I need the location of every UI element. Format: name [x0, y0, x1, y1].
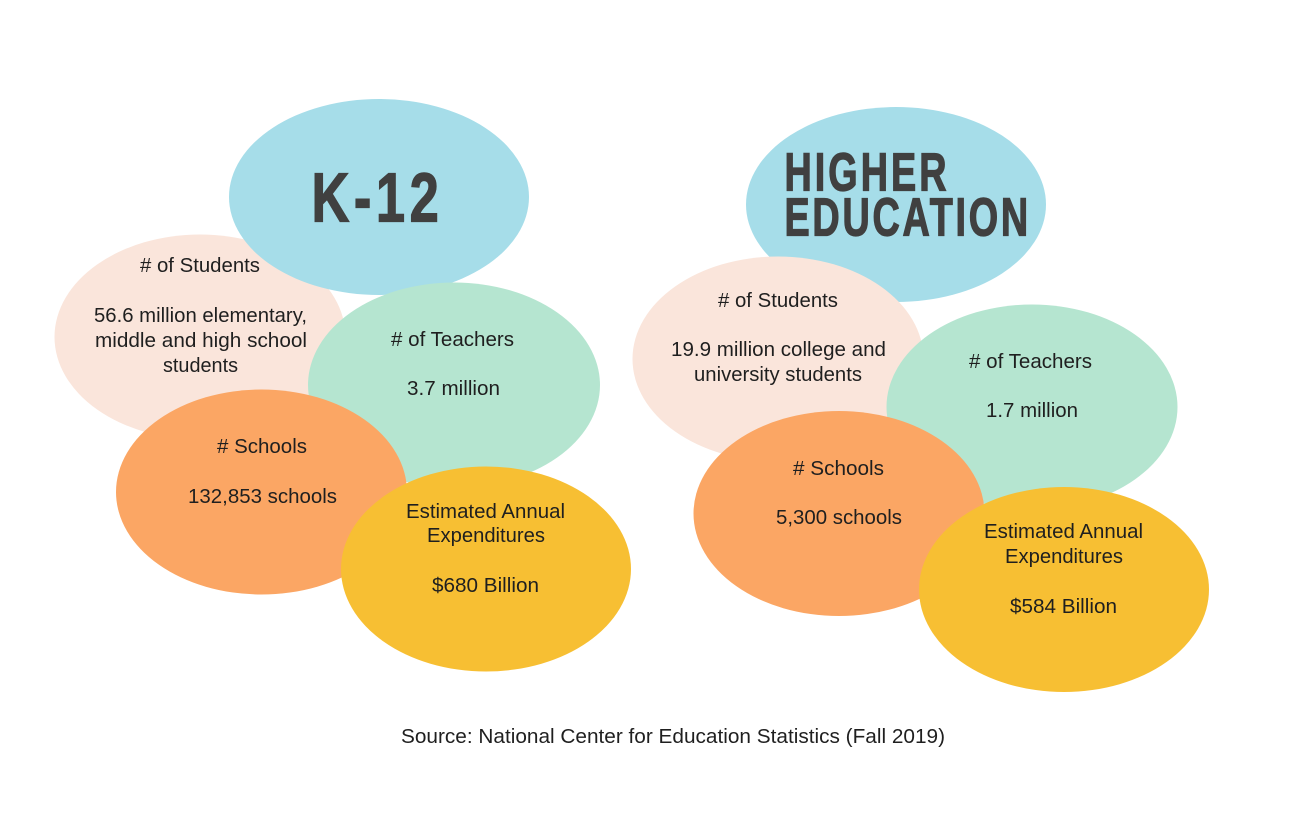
bubble: Higher Ed students: 19.9 million college and: [671, 339, 886, 361]
heading: Higher Education: HIGHER: [784, 142, 950, 202]
bubble: K-12 expenditures: [341, 466, 631, 672]
bubble: Higher Ed teachers: 1.7 million: [986, 400, 1078, 422]
bubble: Higher Ed students: university students: [694, 364, 862, 386]
bubble: K-12 students: students: [163, 355, 238, 377]
bubble: Higher Ed schools: # Schools: [793, 458, 884, 480]
bubble: K-12 expenditures: Expenditures: [427, 525, 545, 547]
bubble: K-12 expenditures: $680 Billion: [432, 575, 539, 597]
source note: Source: National Center for Education Statistics (Fall 2019): [401, 726, 945, 748]
heading: Higher Education: [746, 107, 1046, 302]
bubble: Higher Ed expenditures: $584 Billion: [1010, 596, 1117, 618]
bubble: K-12 expenditures: Estimated Annual: [406, 501, 565, 523]
bubble: K-12 students: middle and high school: [95, 330, 307, 352]
bubble: Higher Ed students: # of Students: [718, 290, 838, 312]
bubble: Higher Ed teachers: # of Teachers: [969, 351, 1092, 373]
bubble: Higher Ed students: [632, 256, 924, 462]
panel: Higher Education: [632, 107, 1209, 692]
bubble: K-12 teachers: 3.7 million: [407, 378, 500, 400]
bubble: K-12 teachers: # of Teachers: [391, 329, 514, 351]
heading: K-12: [229, 99, 529, 295]
bubble: Higher Ed teachers: [886, 304, 1178, 510]
bubble: K-12 students: [54, 234, 346, 440]
bubble: Higher Ed expenditures: [919, 487, 1209, 692]
heading: K-12: K-12: [312, 159, 443, 237]
bubble: K-12 schools: 132,853 schools: [188, 486, 337, 508]
bubble: K-12 schools: [116, 390, 407, 594]
bubble: Higher Ed expenditures: Estimated Annual: [984, 521, 1143, 543]
bubble: Higher Ed expenditures: Expenditures: [1005, 546, 1123, 568]
heading: Higher Education: EDUCATION: [784, 187, 1031, 247]
bubble: K-12 students: 56.6 million elementary,: [94, 305, 307, 327]
bubble: K-12 schools: # Schools: [217, 436, 307, 458]
bubble: Higher Ed schools: 5,300 schools: [776, 507, 902, 529]
bubble: K-12 students: # of Students: [140, 255, 260, 277]
panel: K-12: [54, 99, 631, 672]
bubble: Higher Ed schools: [694, 411, 984, 616]
bubble: K-12 teachers: [308, 282, 600, 488]
